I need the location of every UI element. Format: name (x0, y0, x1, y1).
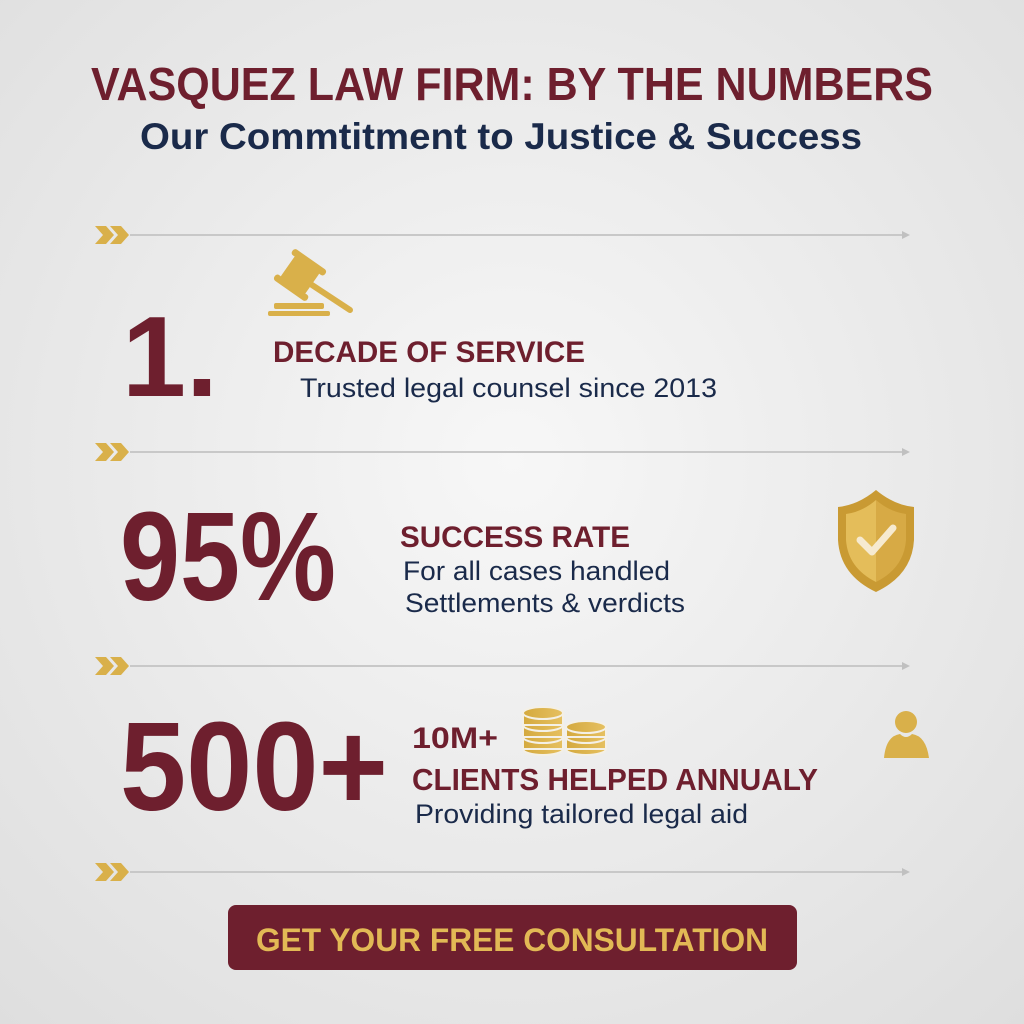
icon: gavel (268, 248, 350, 316)
stat: 500+: 500+ (120, 696, 388, 837)
text: trusted: Trusted legal counsel since 2013 (300, 373, 717, 403)
button: consultation: GET YOUR FREE CONSULTATION (256, 922, 768, 958)
heading: success rate: SUCCESS RATE (400, 521, 630, 554)
icon: coins (523, 707, 606, 755)
stat: 95%: 95% (120, 486, 336, 627)
stat: 1.: 1. (122, 294, 218, 421)
text: providing: Providing tailored legal aid (415, 799, 748, 829)
icon: person (884, 711, 929, 758)
heading: clients helped: CLIENTS HELPED ANNUALY (412, 762, 818, 797)
text: success details: Settlements & verdicts (405, 588, 685, 618)
subtitle: Our Commtitment to Justice & Success (140, 116, 862, 157)
icon: shield (838, 490, 914, 592)
divider 4 (95, 863, 910, 881)
heading: decade of service: DECADE OF SERVICE (273, 336, 585, 369)
divider 1 (95, 226, 910, 244)
text: success details (403, 556, 685, 618)
divider 3 (95, 657, 910, 675)
text: success details: For all cases handled (403, 556, 670, 586)
divider 2 (95, 443, 910, 461)
title: VASQUEZ LAW FIRM: BY THE NUMBERS (91, 58, 933, 110)
button: consultation (228, 905, 797, 970)
text: 10M+: 10M+ (412, 722, 498, 755)
